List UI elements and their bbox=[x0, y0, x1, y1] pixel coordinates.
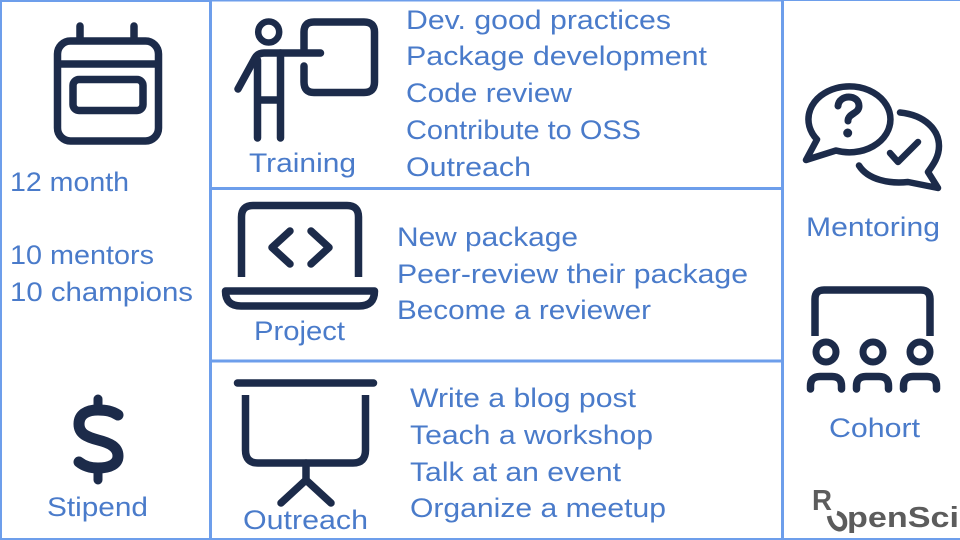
list: outreach activities: Teach a workshop bbox=[410, 420, 653, 450]
list: project tasks: Become a reviewer bbox=[397, 295, 651, 325]
icon: laptop with code bbox=[226, 206, 374, 306]
list: training topics: Contribute to OSS bbox=[406, 115, 641, 145]
list: outreach activities: Organize a meetup bbox=[410, 493, 666, 523]
list: project tasks: Peer-review their package bbox=[397, 259, 748, 289]
list: training topics: Outreach bbox=[406, 152, 531, 182]
panel: support bbox=[806, 86, 959, 534]
list: training topics: Package development bbox=[406, 41, 708, 71]
panel: outreach bbox=[238, 383, 666, 535]
icon: presenter at board bbox=[238, 22, 374, 138]
list: outreach activities: Talk at an event bbox=[410, 457, 622, 487]
list: training topics bbox=[406, 5, 708, 182]
text: program length and participants: 10 mentors bbox=[10, 240, 154, 270]
icon: dollar sign bbox=[79, 399, 118, 480]
logo: rOpenSci: R bbox=[812, 485, 832, 517]
list: training topics: Dev. good practices bbox=[406, 5, 671, 35]
icon: cohort group bbox=[810, 290, 936, 389]
list: outreach activities bbox=[410, 383, 666, 523]
label: cohort: Cohort bbox=[829, 413, 921, 443]
panel: program facts bbox=[10, 26, 193, 522]
list: outreach activities: Write a blog post bbox=[410, 383, 637, 413]
label: project: Project bbox=[254, 316, 346, 346]
icon: calendar bbox=[58, 26, 158, 141]
label: training: Training bbox=[249, 148, 356, 178]
logo: rOpenSci bbox=[812, 485, 959, 534]
logo: rOpenSci: penSci bbox=[847, 502, 959, 534]
list: project tasks: New package bbox=[397, 222, 578, 252]
list: project tasks bbox=[397, 222, 748, 325]
list: training topics: Code review bbox=[406, 78, 573, 108]
panel: training bbox=[238, 5, 708, 182]
text: program length and participants bbox=[10, 167, 193, 307]
icon: projection screen bbox=[238, 383, 374, 503]
text: program length and participants: 12 month bbox=[10, 167, 129, 197]
text: program length and participants: 10 champions bbox=[10, 277, 193, 307]
label: mentoring: Mentoring bbox=[806, 212, 940, 242]
icon: question and answer bubbles bbox=[806, 86, 939, 188]
label: outreach: Outreach bbox=[243, 505, 368, 535]
panel: project bbox=[226, 206, 748, 346]
label: stipend: Stipend bbox=[47, 492, 148, 522]
